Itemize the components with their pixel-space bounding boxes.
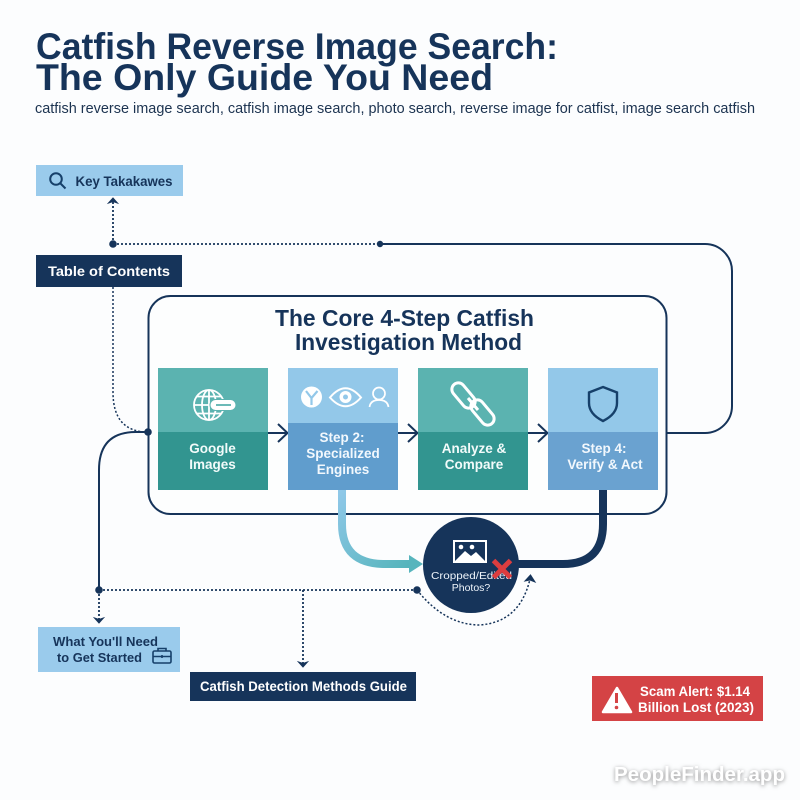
panel heading	[275, 305, 534, 355]
detection guide box	[190, 672, 416, 701]
thick line from step 4	[515, 490, 603, 564]
connector nodes top	[109, 240, 383, 248]
key takeaways box: Key Takakawes	[76, 174, 172, 189]
icon: magnifier	[50, 173, 66, 188]
step 2 card	[288, 368, 398, 490]
connector: loop from panel to top nodes	[108, 198, 732, 433]
connector: left trunk	[99, 432, 148, 590]
step 2 card: Step 2:	[319, 430, 365, 445]
step 3 card	[418, 368, 528, 490]
step 1 card	[158, 368, 268, 490]
step 2 card: Engines	[317, 462, 369, 477]
decision circle	[423, 517, 519, 613]
icon: photo	[454, 541, 486, 562]
step 3 card: Compare	[445, 457, 504, 472]
icon: shield	[589, 387, 617, 421]
icon: chain link	[449, 380, 497, 428]
key takeaways box	[36, 165, 183, 196]
title: The Only Guide You Need	[36, 57, 493, 98]
decision circle: Photos?	[452, 582, 490, 594]
scam alert callout: Scam Alert: $1.14	[640, 684, 750, 699]
title: Catfish Reverse Image Search:	[36, 26, 558, 67]
icon: warning	[603, 688, 631, 712]
decision circle: Cropped/Edited	[431, 570, 512, 582]
arrow 2 to 3	[398, 424, 418, 442]
step 1 card: Google	[189, 441, 236, 456]
arrow 1 to 2	[268, 424, 288, 442]
arrow 3 to 4	[528, 424, 548, 442]
what you'll need box: to Get Started	[57, 650, 142, 665]
what you'll need box	[38, 627, 180, 672]
icons: search engines	[301, 386, 388, 408]
icon: briefcase	[153, 648, 171, 663]
detection guide box: Catfish Detection Methods Guide	[200, 678, 407, 694]
step 4 card	[548, 368, 658, 490]
connector: dotted branch line	[94, 575, 535, 667]
scam alert callout	[592, 676, 763, 721]
scam alert callout: Billion Lost (2023)	[638, 700, 754, 715]
icon: globe with search bar	[194, 390, 236, 420]
connector nodes	[95, 428, 421, 594]
step 2 card: Specialized	[306, 446, 380, 461]
icon: red cross	[494, 560, 510, 578]
step 4 card: Verify & Act	[567, 457, 643, 472]
step 3 card: Analyze &	[442, 441, 507, 456]
panel heading: The Core 4-Step Catfish	[275, 305, 534, 331]
table of contents box: Table of Contents	[48, 263, 170, 279]
step 4 card: Step 4:	[581, 441, 627, 456]
title	[36, 26, 558, 98]
step 1 card: Images	[189, 457, 236, 472]
what you'll need box: What You'll Need	[53, 634, 158, 649]
table of contents box	[36, 255, 182, 287]
subtitle keywords: catfish reverse image search, catfish image search, photo search, reverse image for catfist, image search catfish	[35, 101, 755, 117]
thick arrow from step 2	[342, 490, 423, 573]
panel heading: Investigation Method	[295, 329, 522, 355]
watermark: PeopleFinder.app	[614, 764, 785, 786]
panel: core method	[148, 296, 666, 514]
